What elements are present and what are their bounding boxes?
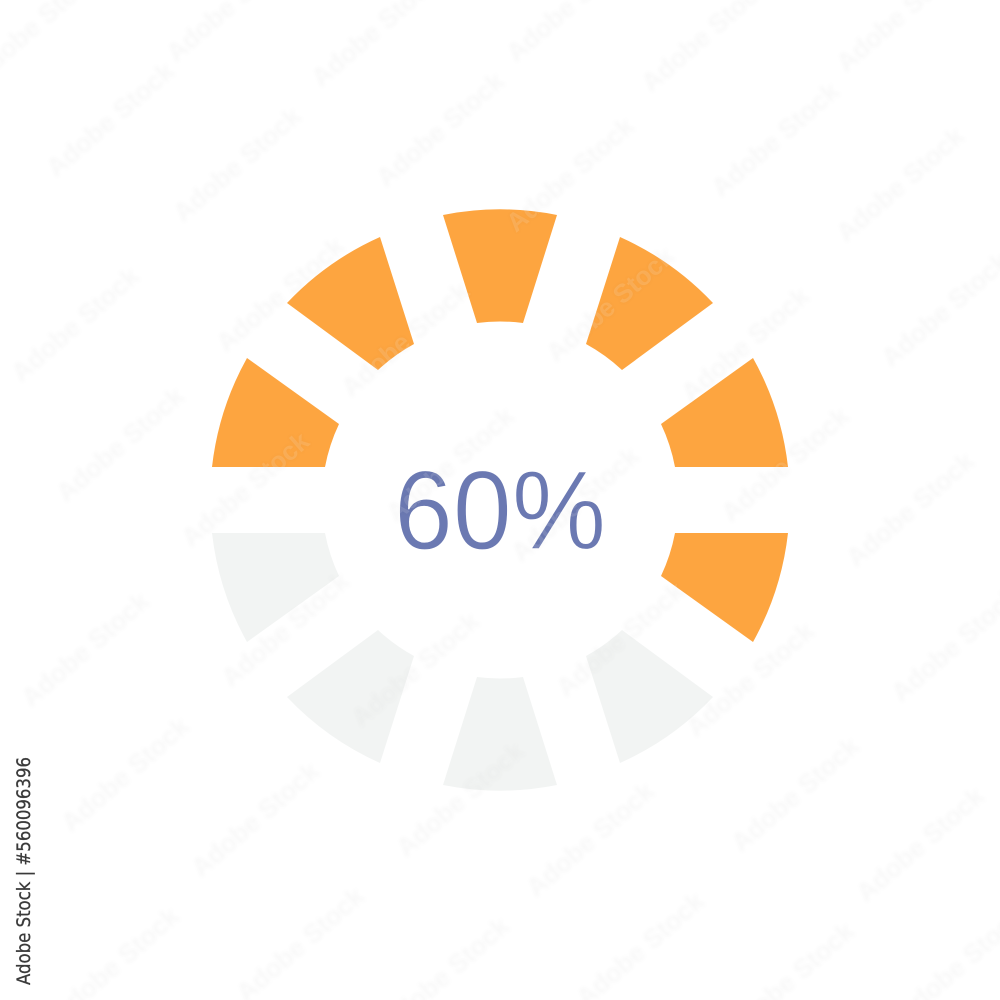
watermark pattern: Adobe Stock	[210, 230, 350, 358]
watermark pattern: Adobe Stock	[55, 710, 195, 838]
watermark pattern: Adobe Stock	[715, 400, 855, 528]
watermark pattern: Adobe Stock	[50, 380, 190, 508]
watermark pattern: Adobe Stock	[550, 575, 690, 703]
watermark pattern: Adobe Stock	[830, 120, 970, 248]
empty segments: 4 of 10	[212, 533, 713, 791]
radial progress gauge	[212, 209, 788, 791]
watermark pattern: Adobe Stock	[390, 735, 530, 863]
watermark pattern: Adobe Stock	[167, 100, 307, 228]
watermark pattern: Adobe Stock	[345, 605, 485, 733]
watermark pattern: Adobe Stock	[5, 260, 145, 388]
watermark pattern: Adobe Stock	[505, 440, 645, 568]
watermark pattern: Adobe Stock	[15, 585, 155, 713]
watermark pattern: Adobe Stock	[680, 615, 820, 743]
watermark pattern: Adobe Stock	[215, 565, 355, 693]
filled segments: 6 of 10	[212, 209, 788, 642]
watermark pattern: Adobe Stock	[540, 240, 680, 368]
watermark pattern: Adobe Stock	[185, 755, 325, 883]
watermark pattern: Adobe Stock	[675, 280, 815, 408]
watermark pattern: Adobe Stock	[175, 425, 315, 553]
side credit text: Adobe Stock | #560096396	[13, 757, 35, 985]
watermark pattern: Adobe Stock	[705, 75, 845, 203]
watermark pattern: Adobe Stock	[840, 445, 980, 573]
watermark pattern: Adobe Stock	[850, 780, 990, 908]
watermark pattern: Adobe Stock	[380, 400, 520, 528]
watermark pattern: Adobe Stock	[370, 65, 510, 193]
watermark pattern: Adobe Stock	[520, 775, 660, 903]
watermark pattern: Adobe Stock	[335, 275, 475, 403]
percentage label: 60%	[394, 448, 606, 573]
watermark pattern: Adobe Stock	[725, 730, 865, 858]
watermark pattern: Adobe Stock	[500, 110, 640, 238]
watermark pattern: Adobe Stock	[40, 55, 180, 183]
